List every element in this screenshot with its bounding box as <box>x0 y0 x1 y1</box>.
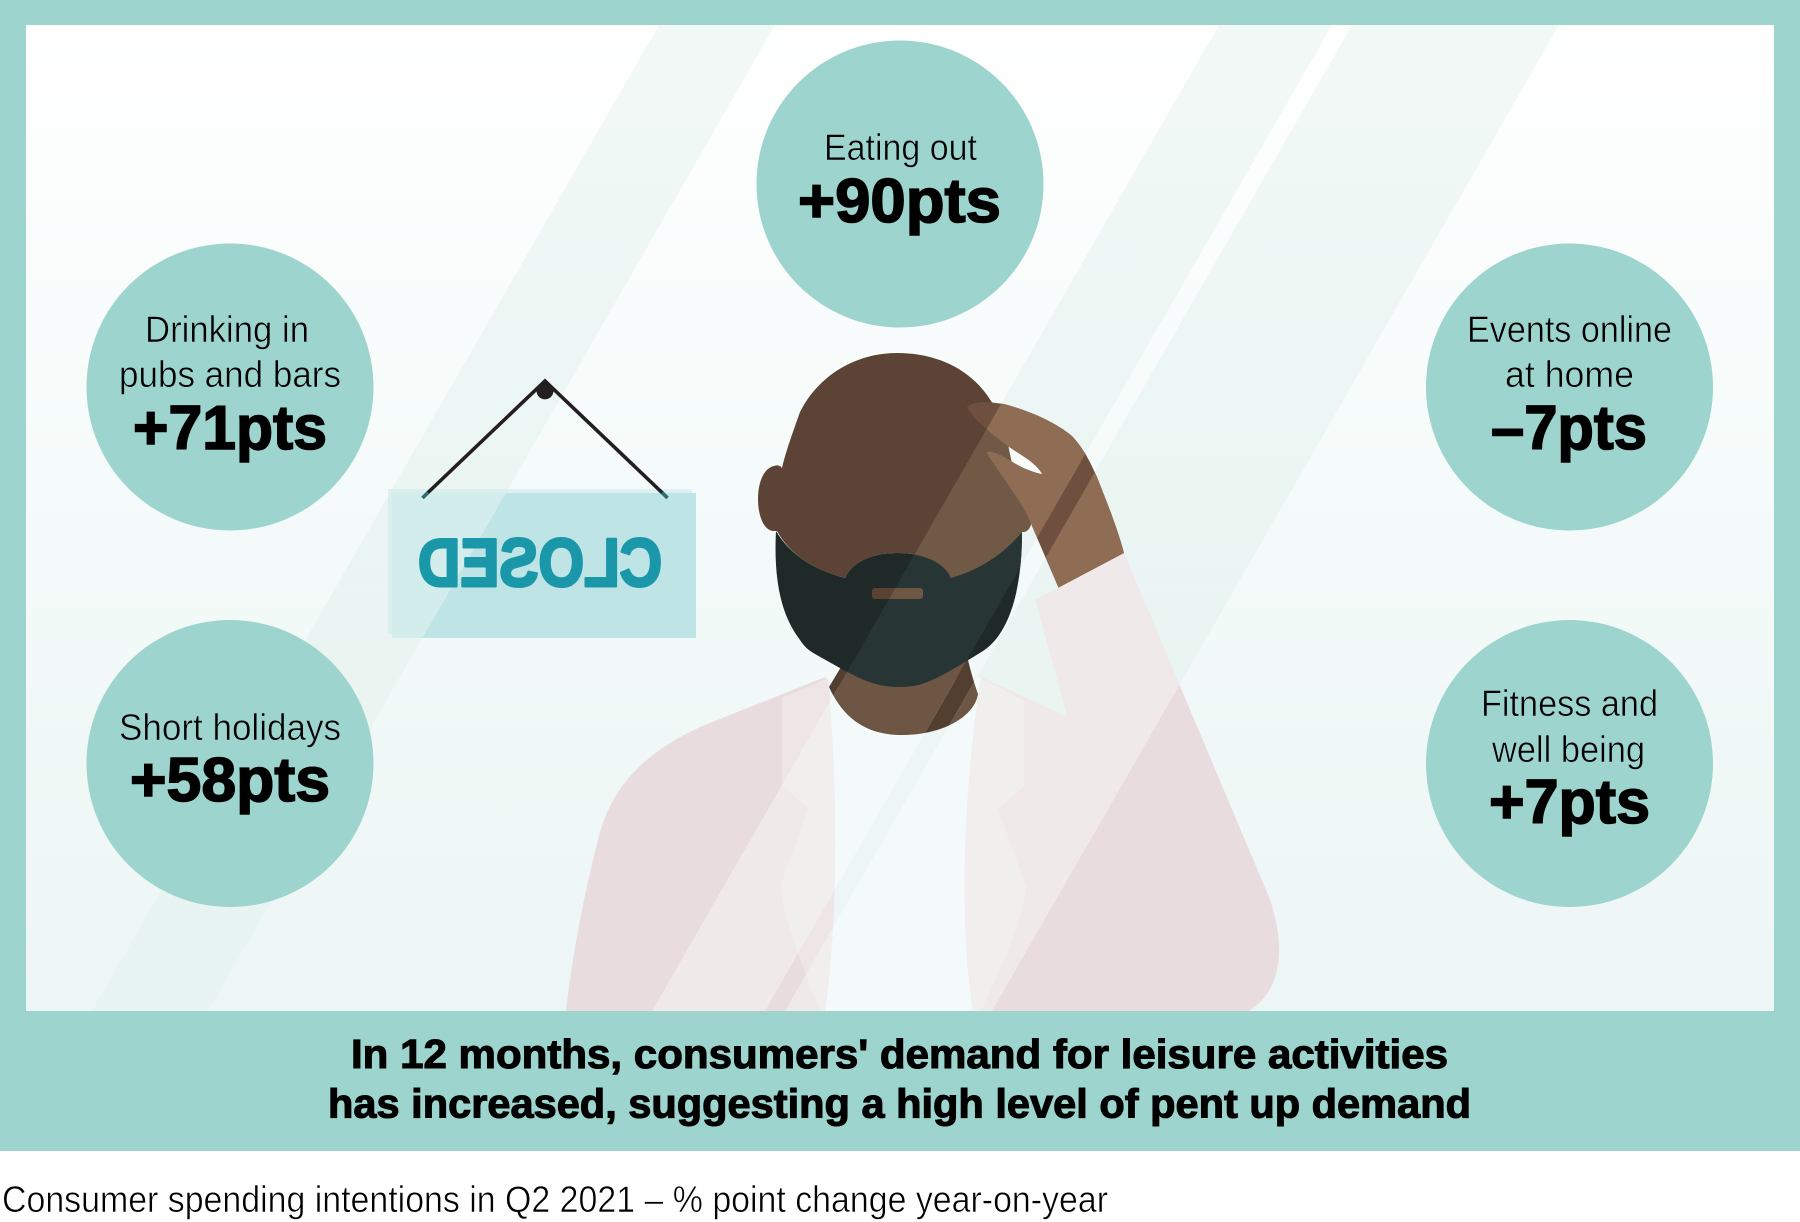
head <box>758 353 1031 578</box>
bubble: drinking in pubs and bars: Drinking in <box>145 309 309 350</box>
bubble: eating out: Eating out <box>824 127 978 168</box>
bubble: drinking in pubs and bars <box>86 244 374 530</box>
bubble: short holidays: +58pts <box>130 746 330 815</box>
lapel right lighter <box>965 678 1026 1011</box>
window panel background <box>26 25 1774 1011</box>
bubble: drinking in pubs and bars: +71pts <box>133 394 327 463</box>
neck lighter <box>829 660 978 735</box>
bubble: fitness and well being: +7pts <box>1489 768 1650 837</box>
bubble: fitness and well being: Fitness and <box>1481 683 1658 724</box>
gap between fingers <box>1009 447 1042 474</box>
hand lighter <box>986 404 1124 588</box>
nail <box>536 381 554 399</box>
beard <box>776 531 1022 687</box>
bubble: eating out: +90pts <box>798 167 1001 236</box>
bottom banner <box>0 1011 1800 1151</box>
hand <box>967 402 1124 588</box>
shirt <box>825 677 981 1011</box>
diagonal glass reflections <box>92 25 1559 1011</box>
bubble: fitness and well being <box>1426 620 1713 907</box>
man illustration seen through reflections <box>652 404 1180 1011</box>
mouth lighter <box>889 588 923 599</box>
head lighter <box>914 430 1031 578</box>
bubble: short holidays: Short holidays <box>119 707 341 748</box>
sign board reflection <box>392 493 506 638</box>
bubble: eating out <box>756 40 1044 328</box>
bubble: drinking in pubs and bars: pubs and bars <box>119 354 341 395</box>
sign shadow plate <box>388 489 692 634</box>
string ends <box>422 492 668 498</box>
shirt lighter <box>834 678 978 735</box>
bubble: events online at home: Events online <box>1467 309 1672 350</box>
beard lighter <box>847 532 1022 687</box>
bottom banner: In 12 months, consumers' demand for leisure activities <box>351 1031 1448 1077</box>
bubble: fitness and well being: well being <box>1491 729 1645 770</box>
jacket right and sleeve <box>992 685 1279 1011</box>
lapel right <box>965 678 1026 1011</box>
mirrored closed text: CLOSED <box>418 525 662 601</box>
hanging string <box>427 381 663 494</box>
bubble: events online at home <box>1426 244 1713 530</box>
jacket left lighter <box>652 786 820 1011</box>
man illustration <box>566 353 1279 1011</box>
bubble: short holidays <box>86 620 374 907</box>
jacket right lighter <box>981 553 1180 1011</box>
jacket left <box>566 677 835 1011</box>
closed sign <box>388 381 696 638</box>
bubble: events online at home: –7pts <box>1491 394 1647 463</box>
finger gap lighter <box>1009 447 1042 474</box>
bottom banner: has increased, suggesting a high level of pent up demand <box>328 1080 1471 1126</box>
neck <box>829 660 978 735</box>
caption: Consumer spending intentions in Q2 2021 – % point change year-on-year <box>2 1179 1108 1220</box>
sign board <box>392 493 696 638</box>
lapel left <box>782 678 834 974</box>
mouth <box>872 588 895 599</box>
lapel left lighter <box>830 702 832 724</box>
bubble: events online at home: at home <box>1505 354 1634 395</box>
